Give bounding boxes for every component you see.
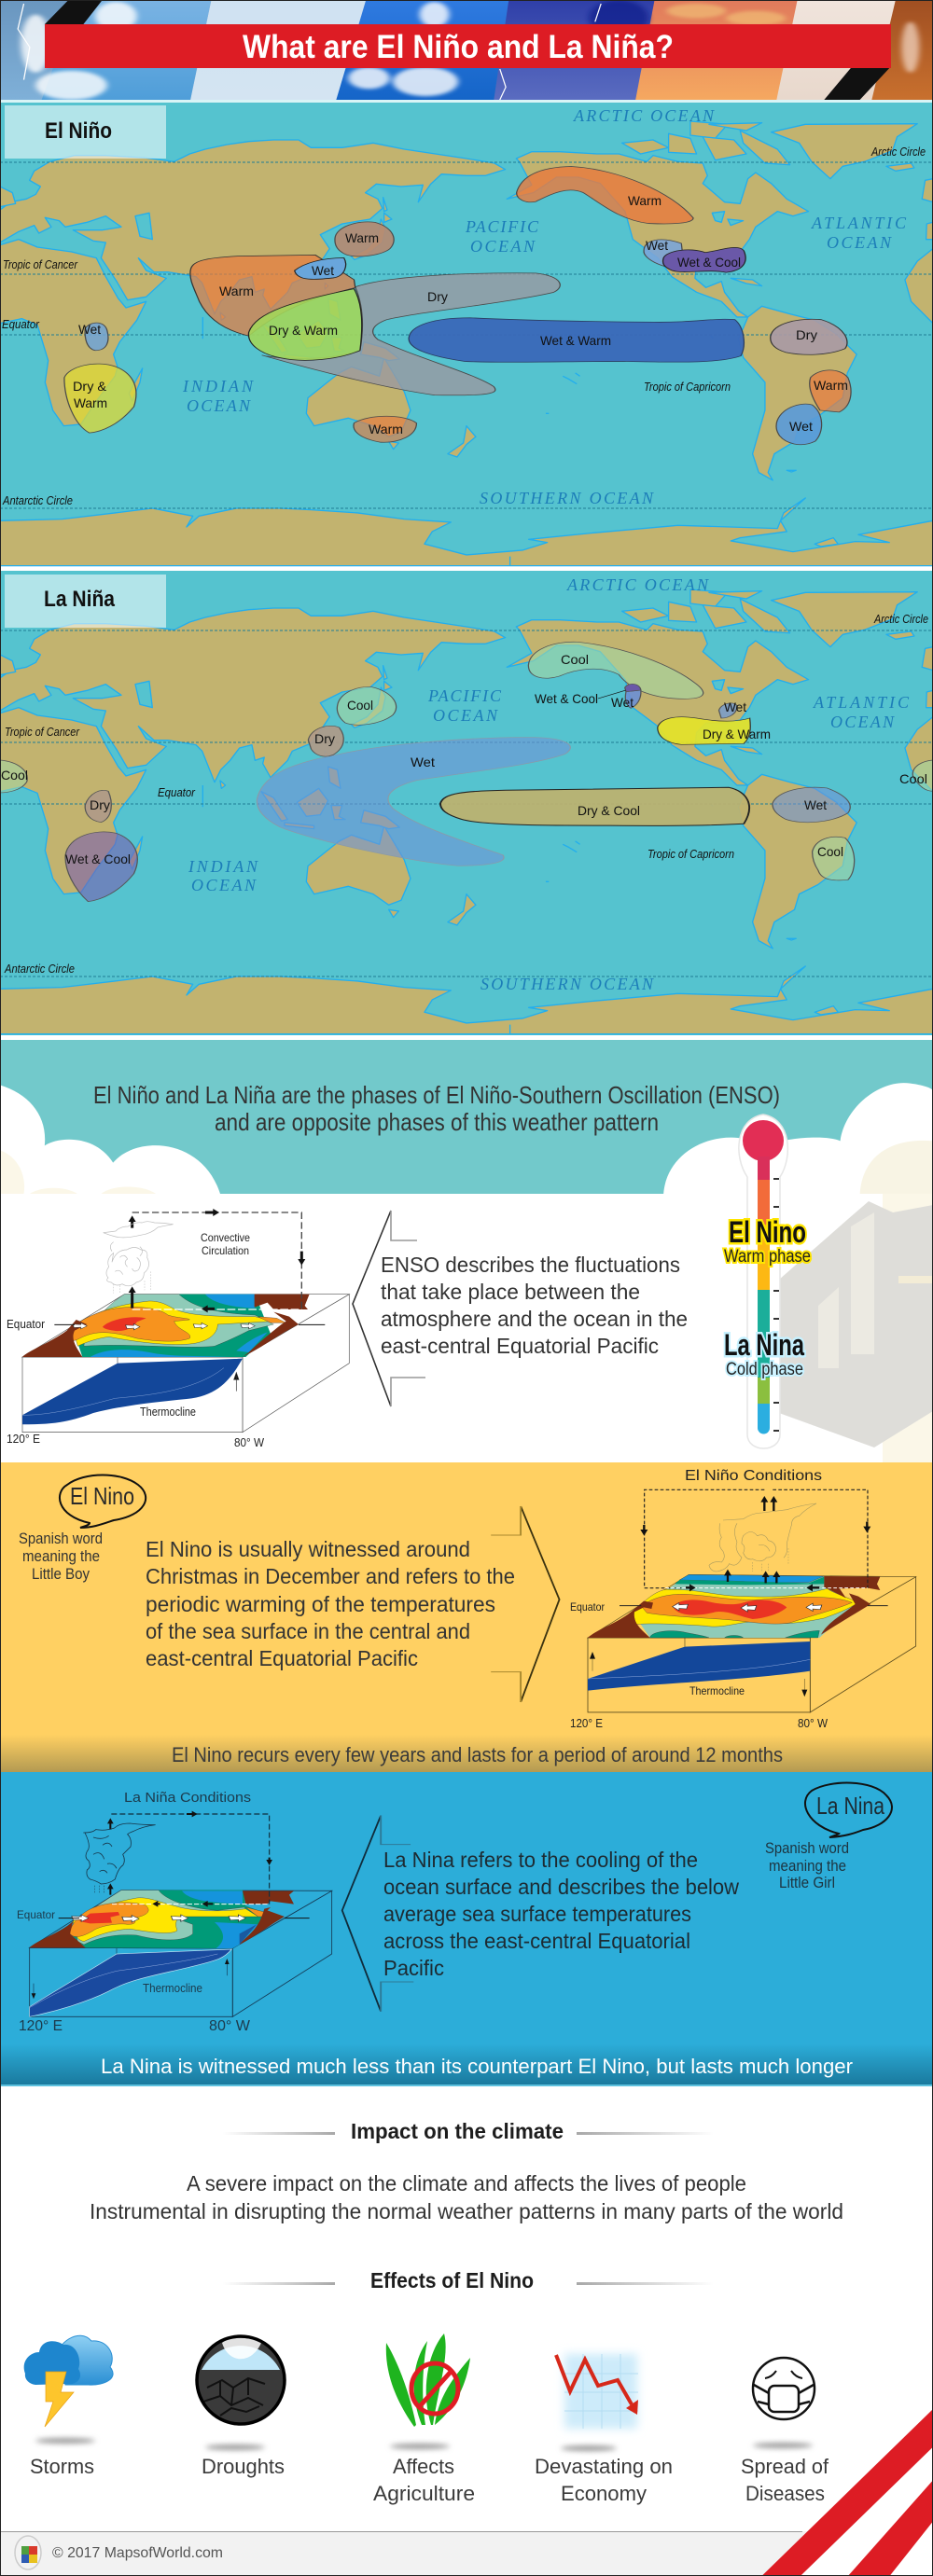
ocean names, La Niña xyxy=(188,575,910,993)
region labels, El Niño: Warm xyxy=(219,284,254,298)
region labels, La Niña: Cool xyxy=(347,698,373,713)
La Nina duration note: La Nina is witnessed much less than its counterpart El Nino, but lasts much longer xyxy=(101,2055,853,2078)
panel: El Nino xyxy=(0,1462,933,1772)
world land base xyxy=(0,589,933,1034)
ENSO description text: ENSO describes the fluctuations xyxy=(381,1253,680,1277)
effect: Droughts: Droughts xyxy=(202,2455,285,2478)
El Nino warm phase label: El Nino xyxy=(729,1215,806,1249)
heading: Impact on the climate xyxy=(223,2119,714,2143)
El Nino description xyxy=(146,1537,515,1670)
ocean names, La Niña: OCEAN xyxy=(191,876,257,894)
region labels, El Niño: Warm xyxy=(369,422,403,436)
impact text xyxy=(90,2171,843,2223)
La Nina cold phase label: Cold phase xyxy=(726,1360,803,1379)
region labels, La Niña: Wet xyxy=(611,695,634,710)
ocean names, La Niña: INDIAN xyxy=(188,857,258,876)
region labels, El Niño: Dry xyxy=(427,289,448,304)
panel: ENSO intro: El Niño and La Niña are the phases of El Niño-Southern Oscillation (ENSO) xyxy=(93,1081,780,1109)
ocean names, El Niño: ARCTIC OCEAN xyxy=(573,106,715,125)
La Nina description xyxy=(383,1848,739,1980)
icon: face with mask xyxy=(753,2358,815,2448)
region labels, La Niña: Cool xyxy=(561,652,589,667)
El Niño diagram labels: Equator xyxy=(570,1600,605,1613)
region labels, El Niño: Wet xyxy=(78,322,101,337)
diagram labels: 120° E xyxy=(7,1432,40,1446)
speech bubble: El Nino: El Nino xyxy=(70,1482,134,1510)
region labels, La Niña: Wet & Cool xyxy=(535,691,598,706)
diagram labels: Thermocline xyxy=(140,1405,196,1419)
region labels, La Niña xyxy=(1,652,927,866)
region labels, El Niño: Dry xyxy=(796,327,817,342)
region labels, La Niña: Wet xyxy=(724,699,746,714)
footer: © 2017 MapsofWorld.com xyxy=(52,2545,223,2561)
convective circulation diagram xyxy=(22,1209,349,1433)
icon: falling chart xyxy=(556,2354,638,2451)
translucent tag: La Niña: La Niña xyxy=(44,587,116,612)
La Nina description: average sea surface temperatures xyxy=(383,1902,691,1926)
latitude labels, La Niña: Equator xyxy=(158,785,196,799)
region labels, El Niño: Wet & Cool xyxy=(677,255,741,270)
heading: Effects of El Nino: Effects of El Nino xyxy=(370,2268,534,2292)
ocean names, La Niña: PACIFIC xyxy=(427,686,502,705)
climate regions, La Niña xyxy=(0,642,933,902)
ocean names, El Niño: SOUTHERN OCEAN xyxy=(480,489,654,507)
Spanish word note xyxy=(19,1530,103,1583)
ocean names, El Niño: INDIAN xyxy=(182,377,254,395)
La Niña diagram labels: Equator xyxy=(17,1908,55,1921)
region labels, La Niña: Dry xyxy=(314,731,335,746)
latitude labels, El Niño: Tropic of Capricorn xyxy=(644,380,731,394)
impact text: Instrumental in disrupting the normal weather patterns in many parts of the world xyxy=(90,2199,843,2223)
effect: Devastating on Economy: Devastating on xyxy=(535,2455,673,2478)
chevron callout xyxy=(353,1211,425,1406)
Spanish word note: Little Boy xyxy=(32,1565,90,1583)
panel: ENSO intro: and are opposite phases of this weather pattern xyxy=(215,1108,659,1136)
diagram labels: Circulation xyxy=(202,1244,249,1257)
ENSO description text: that take place between the xyxy=(381,1280,640,1304)
building backdrop xyxy=(779,1201,933,1447)
effect: Spread of Diseases xyxy=(741,2358,829,2505)
region labels, La Niña: Cool xyxy=(817,844,843,859)
region labels, El Niño: Warm xyxy=(345,230,379,245)
ENSO description text: east-central Equatorial Pacific xyxy=(381,1334,659,1358)
region labels, El Niño: Wet & Warm xyxy=(540,333,611,348)
La Nina cold phase label xyxy=(724,1328,804,1379)
region labels, El Niño: Wet xyxy=(789,419,813,434)
El Niño diagram labels: Thermocline xyxy=(689,1684,745,1697)
El Nino description: periodic warming of the temperatures xyxy=(146,1592,495,1616)
panel: La Niña map xyxy=(0,571,933,1035)
effect: Spread of Diseases: Diseases xyxy=(745,2482,825,2505)
ocean names, El Niño: OCEAN xyxy=(187,396,251,415)
La Nina description: across the east-central Equatorial xyxy=(383,1929,690,1953)
effect: Storms xyxy=(24,2335,113,2478)
title bar xyxy=(45,24,891,68)
ocean names, La Niña: OCEAN xyxy=(433,706,498,725)
El Niño conditions diagram xyxy=(588,1489,916,1712)
El Nino warm phase label xyxy=(724,1215,811,1267)
region labels, El Niño: Warm xyxy=(74,395,107,410)
effect: Storms: Storms xyxy=(30,2455,94,2478)
region labels, El Niño: Dry & Warm xyxy=(269,323,338,338)
chevron callout xyxy=(342,1816,413,2012)
ocean names, La Niña: ATLANTIC xyxy=(813,693,910,712)
region labels, El Niño xyxy=(73,193,848,436)
La Nina description: ocean surface and describes the below xyxy=(383,1875,739,1899)
ocean names, El Niño: OCEAN xyxy=(827,233,892,252)
diagram labels: 80° W xyxy=(234,1435,265,1449)
region labels, El Niño: Warm xyxy=(814,378,848,393)
effect: Spread of Diseases: Spread of xyxy=(741,2455,829,2478)
Spanish word note: meaning the xyxy=(769,1857,846,1875)
latitude labels, El Niño: Tropic of Cancer xyxy=(3,257,78,271)
region labels, La Niña: Dry & Cool xyxy=(578,803,640,818)
El Niño diagram labels: El Niño Conditions xyxy=(685,1468,822,1484)
icon: cracked earth xyxy=(197,2336,285,2450)
diagram labels: Equator xyxy=(7,1317,46,1331)
world land base xyxy=(0,121,933,566)
region labels, La Niña: Wet & Cool xyxy=(65,852,131,866)
El Nino description: of the sea surface in the central and xyxy=(146,1619,470,1643)
Spanish word note: Little Girl xyxy=(779,1874,835,1891)
region labels, La Niña: Wet xyxy=(411,755,435,769)
title bar: What are El Niño and La Niña? xyxy=(243,29,674,65)
La Nina description: La Nina refers to the cooling of the xyxy=(383,1848,698,1872)
La Niña diagram labels xyxy=(17,1790,251,2034)
El Niño diagram labels xyxy=(570,1468,829,1730)
region labels, El Niño: Dry & xyxy=(73,379,107,394)
El Niño diagram labels: 80° W xyxy=(798,1716,829,1730)
latitude labels, La Niña: Tropic of Cancer xyxy=(5,725,80,739)
latitude labels, El Niño xyxy=(2,145,926,507)
icon: storm cloud with lightning xyxy=(24,2335,113,2444)
panel: ENSO description xyxy=(0,1115,933,1462)
ocean names, La Niña: SOUTHERN OCEAN xyxy=(480,975,654,993)
Spanish word note: meaning the xyxy=(22,1547,100,1565)
La Niña diagram labels: 120° E xyxy=(19,2018,63,2034)
La Niña diagram labels: 80° W xyxy=(209,2018,251,2034)
effect: Droughts xyxy=(197,2336,285,2478)
La Nina description: Pacific xyxy=(383,1956,444,1980)
La Niña diagram labels: Thermocline xyxy=(143,1981,202,1995)
header band: sky and storm photo strips xyxy=(0,0,933,100)
translucent tag: La Niña xyxy=(5,575,166,628)
Spanish word note: Spanish word xyxy=(765,1839,849,1857)
effect: Affects Agriculture: Agriculture xyxy=(373,2482,475,2505)
clouds xyxy=(0,1083,933,1194)
El Nino description: Christmas in December and refers to the xyxy=(146,1564,515,1588)
heading: Impact on the climate: Impact on the climate xyxy=(351,2119,564,2143)
ENSO description text xyxy=(381,1253,688,1358)
translucent tag: El Niño: El Niño xyxy=(45,118,112,144)
ocean names, El Niño: ATLANTIC xyxy=(811,214,907,232)
effect: Devastating on Economy: Economy xyxy=(561,2482,647,2505)
ocean names, El Niño: PACIFIC xyxy=(465,217,539,236)
El Nino description: east-central Equatorial Pacific xyxy=(146,1646,418,1670)
diagram labels: Convective xyxy=(201,1231,250,1244)
Spanish word note xyxy=(765,1839,849,1891)
effect: Affects Agriculture: Affects xyxy=(393,2455,454,2478)
ocean names, La Niña: ARCTIC OCEAN xyxy=(566,575,709,594)
latitude labels, El Niño: Antarctic Circle xyxy=(2,493,73,507)
effect: Devastating on Economy xyxy=(535,2354,673,2505)
El Nino description: El Nino is usually witnessed around xyxy=(146,1537,470,1561)
region labels, El Niño: Wet xyxy=(646,238,668,253)
impact text: A severe impact on the climate and affects the lives of people xyxy=(187,2171,746,2195)
region labels, La Niña: Cool xyxy=(899,771,927,786)
region labels, La Niña: Dry & Warm xyxy=(703,727,771,741)
region labels, La Niña: Dry xyxy=(90,797,110,812)
effect: Affects Agriculture xyxy=(373,2334,475,2505)
La Nina cold phase label: La Nina xyxy=(724,1328,804,1362)
decorative red stripes xyxy=(761,2409,933,2576)
El Nino recurrence note: El Nino recurs every few years and lasts for a period of around 12 months xyxy=(172,1743,783,1766)
latitude labels, La Niña: Antarctic Circle xyxy=(4,962,75,976)
El Nino warm phase label: Warm phase xyxy=(724,1247,811,1267)
La Niña conditions diagram xyxy=(30,1811,332,2016)
climate regions, El Niño xyxy=(64,166,851,445)
speech bubble: La Nina: La Nina xyxy=(816,1792,884,1820)
latitude labels, El Niño: Equator xyxy=(2,317,40,331)
panel: ENSO intro xyxy=(0,1040,933,1194)
translucent tag: El Niño xyxy=(5,105,166,159)
chevron callout xyxy=(491,1506,560,1702)
panel: La Nina xyxy=(0,1772,933,2086)
latitude labels, La Niña xyxy=(4,612,928,976)
ocean names, La Niña: OCEAN xyxy=(830,713,895,731)
speech bubble: La Nina xyxy=(805,1783,892,1837)
diagram labels xyxy=(7,1231,265,1449)
region labels, El Niño: Warm xyxy=(628,193,661,208)
ENSO description text: atmosphere and the ocean in the xyxy=(381,1307,688,1331)
ocean names, El Niño: OCEAN xyxy=(470,237,536,256)
speech bubble: El Nino xyxy=(60,1475,146,1528)
La Niña diagram labels: La Niña Conditions xyxy=(124,1790,251,1806)
icon: crop with prohibition sign xyxy=(386,2334,470,2449)
region labels, La Niña: Wet xyxy=(804,797,827,812)
latitude labels, La Niña: Tropic of Capricorn xyxy=(648,847,734,861)
region labels, El Niño: Wet xyxy=(312,263,334,278)
heading: Effects of El Nino xyxy=(223,2268,714,2292)
ocean names, El Niño xyxy=(182,106,907,507)
footer xyxy=(0,2531,933,2576)
thermometer xyxy=(724,1115,811,1448)
region labels, La Niña: Cool xyxy=(1,768,28,782)
Spanish word note: Spanish word xyxy=(19,1530,103,1547)
El Niño diagram labels: 120° E xyxy=(570,1716,603,1730)
logo xyxy=(15,2536,41,2569)
panel: El Niño map xyxy=(0,103,933,566)
